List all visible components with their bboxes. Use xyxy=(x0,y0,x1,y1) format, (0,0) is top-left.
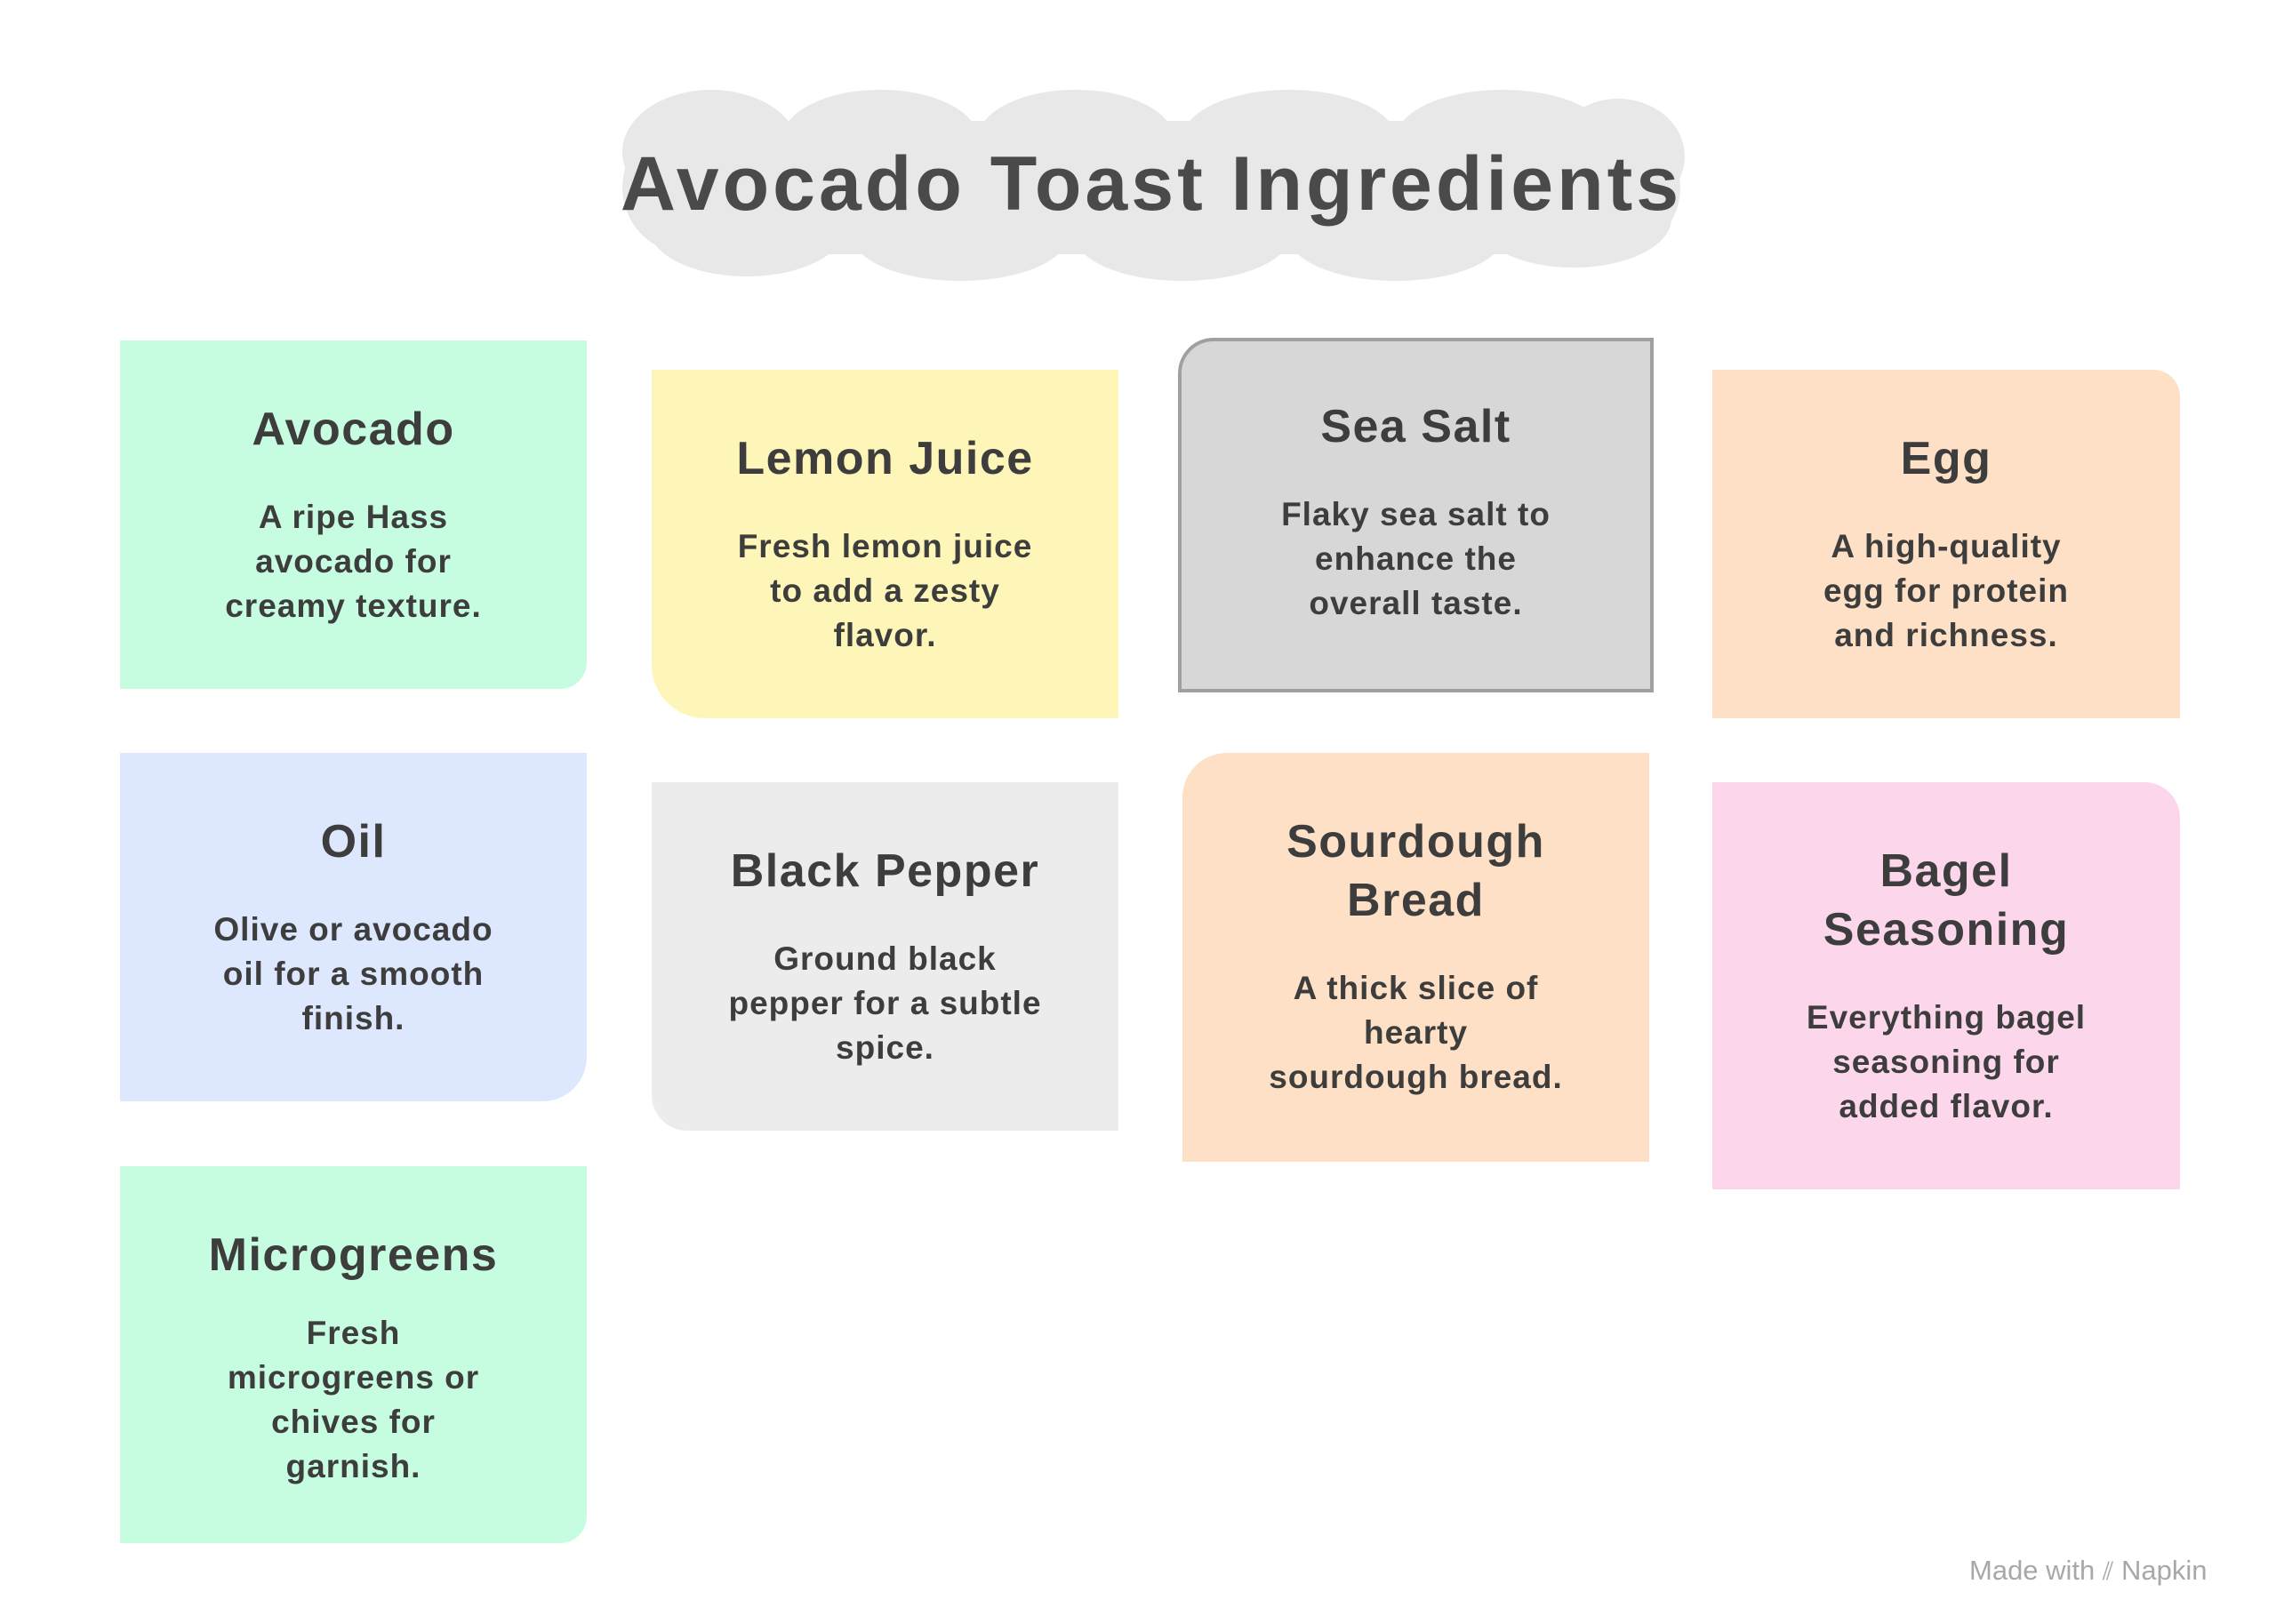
card: oil: Oil xyxy=(321,816,386,868)
card: sourdough bread: sourdough bread. xyxy=(1269,1059,1563,1095)
card: oil xyxy=(120,753,587,1101)
card: lemon juice xyxy=(652,370,1118,718)
card: black pepper: spice. xyxy=(836,1029,934,1066)
card: lemon juice: Lemon Juice xyxy=(736,433,1034,484)
card: egg: egg for protein xyxy=(1823,572,2069,609)
card: microgreens: Fresh xyxy=(307,1315,400,1351)
card: lemon juice: to add a zesty xyxy=(770,572,1000,609)
card: egg: and richness. xyxy=(1834,617,2058,653)
card: black pepper: Ground black xyxy=(773,940,997,977)
card: avocado: creamy texture. xyxy=(225,588,482,624)
card: oil: oil for a smooth xyxy=(223,956,484,992)
card: lemon juice: flavor. xyxy=(834,617,937,653)
card: bagel seasoning xyxy=(1712,782,2180,1189)
card: microgreens: chives for xyxy=(271,1404,436,1440)
card: sea salt: enhance the xyxy=(1315,540,1517,577)
card: oil: finish. xyxy=(302,1000,405,1036)
title xyxy=(621,90,1685,281)
card: sourdough bread: Sourdough xyxy=(1286,816,1545,868)
card: black pepper: Black Pepper xyxy=(731,845,1039,897)
card: bagel seasoning: added flavor. xyxy=(1839,1088,2054,1124)
card: black pepper: pepper for a subtle xyxy=(728,985,1042,1021)
card: microgreens: garnish. xyxy=(286,1448,421,1484)
card: egg: A high-quality xyxy=(1831,528,2062,564)
card: sourdough bread: Bread xyxy=(1347,875,1485,926)
card: lemon juice: Fresh lemon juice xyxy=(738,528,1032,564)
card: microgreens: microgreens or xyxy=(228,1359,479,1396)
card: bagel seasoning: Bagel xyxy=(1879,845,2013,897)
card: avocado xyxy=(120,340,587,689)
card: bagel seasoning: Everything bagel xyxy=(1807,999,2086,1036)
card: sea salt: Sea Salt xyxy=(1320,401,1511,452)
card: egg: Egg xyxy=(1901,433,1992,484)
card: avocado: A ripe Hass xyxy=(259,499,448,535)
card: avocado: Avocado xyxy=(252,404,455,455)
title: Avocado Toast Ingredients xyxy=(621,141,1682,227)
card: sea salt: Flaky sea salt to xyxy=(1281,496,1551,532)
card: oil: Olive or avocado xyxy=(213,911,493,948)
card: bagel seasoning: Seasoning xyxy=(1823,904,2069,956)
card: microgreens: Microgreens xyxy=(209,1229,498,1281)
card: sourdough bread: A thick slice of xyxy=(1294,970,1538,1006)
card: bagel seasoning: seasoning for xyxy=(1832,1044,2060,1080)
footer: made with napkin: Made with ⫽ Napkin xyxy=(1969,1555,2208,1586)
card: sourdough bread xyxy=(1182,753,1649,1162)
card: egg xyxy=(1712,370,2180,718)
card: black pepper xyxy=(652,782,1118,1131)
card: sea salt: overall taste. xyxy=(1309,585,1523,621)
card: sea salt xyxy=(1178,338,1654,692)
card: sourdough bread: hearty xyxy=(1364,1014,1468,1051)
card: avocado: avocado for xyxy=(255,543,452,580)
card: microgreens xyxy=(120,1166,587,1543)
